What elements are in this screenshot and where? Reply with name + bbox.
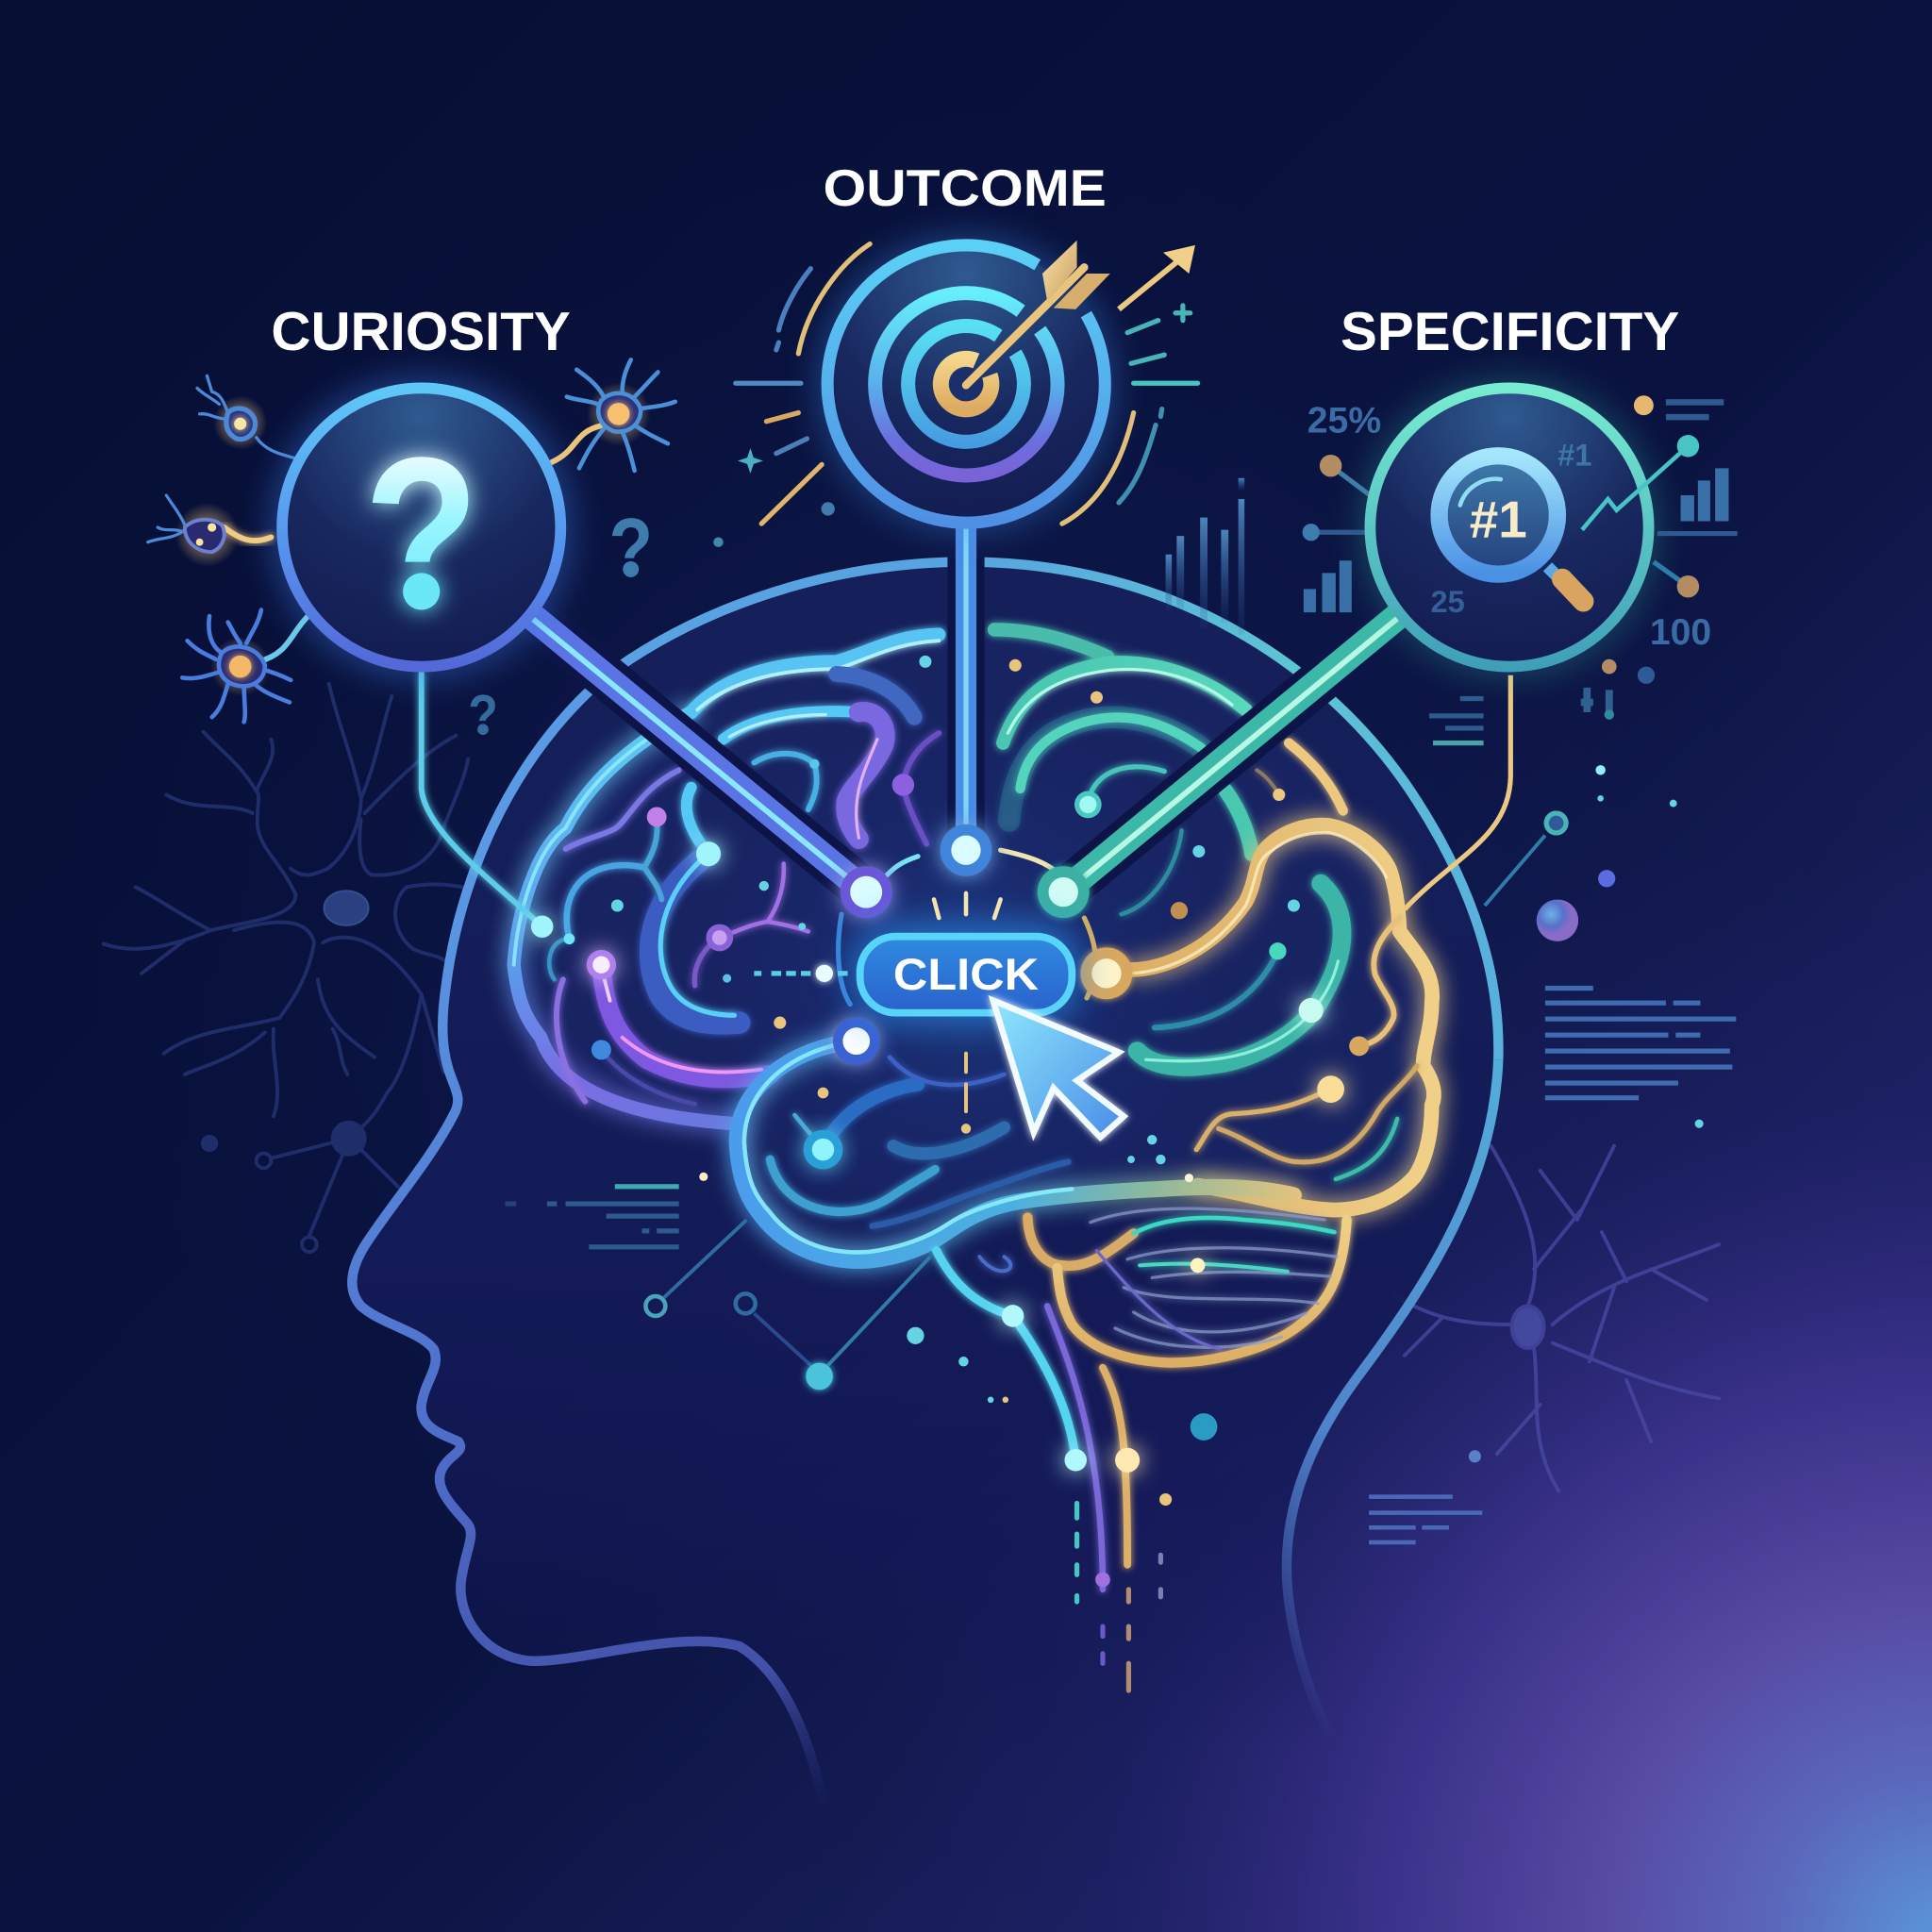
icon: question mark: ? — [364, 411, 479, 657]
brain: lower inner folds — [770, 1058, 1068, 1226]
specificity: inner labels: 25 — [1431, 584, 1465, 619]
brain: brainstem — [937, 1251, 1127, 1590]
neuron: upper right — [552, 359, 675, 471]
brain: gold and green inner folds — [1138, 883, 1417, 1179]
faint bar chart — [1166, 478, 1244, 635]
brain: top-right folds — [994, 629, 1343, 914]
curiosity heading: CURIOSITY — [271, 302, 571, 362]
outcome connector — [952, 524, 980, 850]
text-line block: left — [506, 1184, 679, 1249]
outcome heading: OUTCOME — [823, 158, 1107, 217]
icon: target — [827, 245, 1105, 523]
brain: top-left contour — [687, 635, 939, 854]
text-line block: lower right — [1369, 1494, 1482, 1544]
node: outcome end — [941, 824, 991, 876]
curiosity connector — [518, 604, 866, 892]
icon: magnifying glass: #1 — [1470, 490, 1527, 548]
stat labels: 25% — [1307, 400, 1381, 441]
node: specificity end — [1038, 866, 1090, 918]
node: cyan lower — [804, 1130, 842, 1170]
specificity: inner labels — [1431, 438, 1591, 619]
scattered dots and dashes — [611, 656, 1704, 1506]
solid small nodes — [564, 759, 1369, 1587]
glow behind click — [708, 715, 1224, 1232]
faint neuron: right background — [1392, 1146, 1719, 1491]
thin connector: curiosity to brain — [422, 672, 542, 926]
icon: growth arrow — [1119, 245, 1195, 309]
brain: cerebellum — [1027, 1208, 1347, 1363]
neuron: upper left — [197, 375, 295, 458]
icon: trend line — [1582, 435, 1699, 530]
decorative question marks — [470, 518, 649, 736]
panel: outcome — [818, 235, 1114, 531]
thin connector: specificity to brain — [1405, 675, 1510, 909]
stat labels — [1307, 400, 1711, 653]
node: gold — [1080, 947, 1132, 999]
head silhouette — [352, 562, 1498, 1870]
panel: specificity — [1303, 379, 1738, 745]
stat labels: 100 — [1650, 612, 1711, 653]
specificity heading: SPECIFICITY — [1341, 302, 1679, 362]
icon: magnifying glass — [1440, 456, 1583, 601]
neuron: lower left — [182, 610, 308, 722]
neuron: middle left — [148, 495, 271, 567]
click button — [850, 924, 1080, 1023]
node: curiosity end — [841, 866, 892, 918]
glowing small nodes — [531, 841, 1344, 1473]
brain: right gold lobe — [1131, 825, 1434, 1210]
faint neuron: left background — [104, 684, 468, 1252]
specificity connector — [1063, 607, 1411, 892]
node: lower blue — [833, 1018, 880, 1064]
decorative question marks: ? — [608, 501, 653, 595]
brain: lobe backgrounds — [522, 630, 1431, 1256]
click button: CLICK — [893, 949, 1039, 999]
brain — [514, 629, 1434, 1590]
dashed signal trails — [1077, 1503, 1160, 1690]
outcome decorative rays — [713, 244, 1198, 547]
text-line block: right — [1545, 986, 1736, 1100]
panel: curiosity — [148, 359, 675, 722]
lower left network — [645, 1220, 930, 1390]
specificity: inner labels: #1 — [1557, 438, 1591, 473]
decorative question marks: ? — [468, 683, 498, 746]
nodes — [531, 759, 1369, 1587]
specificity side graphics — [1303, 395, 1738, 745]
cursor arrow — [993, 1001, 1124, 1138]
click target arcs — [839, 850, 1095, 1004]
brain: left outer contour — [514, 712, 736, 1124]
brain: left folds — [549, 770, 808, 1104]
icon: arrow in target — [966, 241, 1110, 385]
brain: lower blue lobe — [737, 1041, 1293, 1260]
